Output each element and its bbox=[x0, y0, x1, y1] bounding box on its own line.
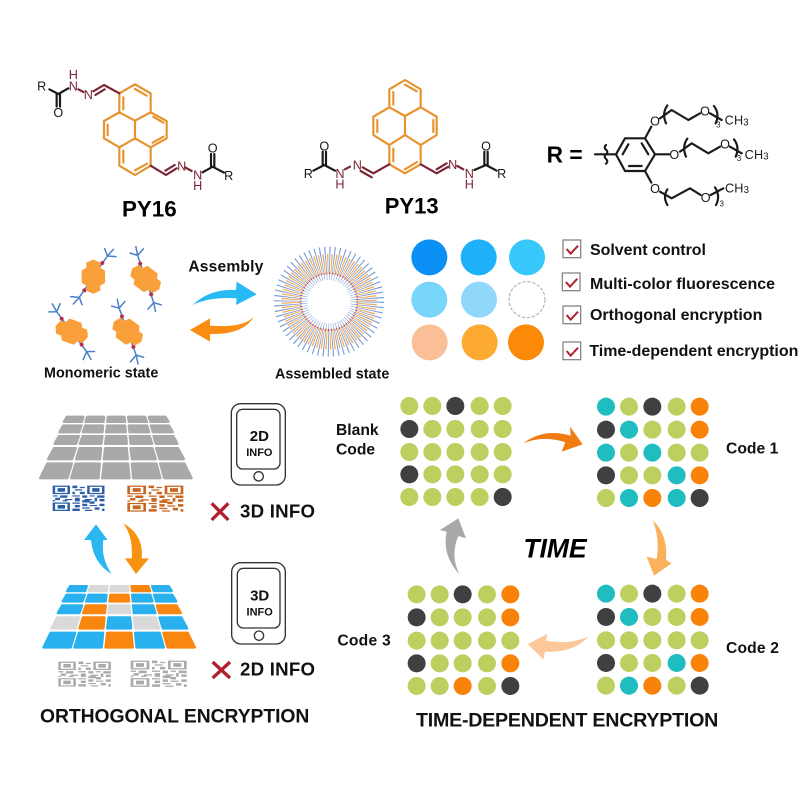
atom labels PY16 bbox=[37, 68, 233, 193]
label code 1: Code 1 bbox=[726, 441, 779, 458]
phone: 3D info bbox=[232, 563, 285, 644]
dot grid: blank code bbox=[400, 397, 512, 506]
chain atoms: O bbox=[720, 138, 730, 152]
checklist item: time-dependent encryption: Time-dependent encryption bbox=[589, 343, 798, 360]
atom labels PY16: N bbox=[177, 160, 186, 174]
phone: 3D info: 3D bbox=[250, 587, 269, 604]
heading: time-dependent encryption: TIME-DEPENDENT ENCRYPTION bbox=[416, 710, 718, 732]
panel: assembly process bbox=[38, 244, 389, 383]
chain atoms: 3 bbox=[744, 185, 749, 196]
chain atoms: O bbox=[701, 191, 711, 205]
atom labels PY13: O bbox=[481, 139, 491, 153]
atom labels PY16: O bbox=[53, 106, 63, 120]
chain atoms: CH bbox=[725, 181, 743, 195]
label TIME: TIME bbox=[523, 534, 588, 564]
gray QR code left bbox=[58, 662, 111, 687]
molecule: PY13 bbox=[304, 80, 506, 218]
atom labels PY16: N bbox=[69, 79, 78, 93]
carbonyl bonds PY13 bbox=[313, 152, 497, 171]
phone: 3D info: INFO bbox=[247, 606, 273, 618]
atom labels PY13 bbox=[304, 139, 506, 192]
blue QR code bbox=[53, 486, 104, 511]
swatch row 3 bbox=[412, 324, 544, 360]
gray perspective grid bbox=[40, 417, 191, 478]
checklist item: multi-color fluorescence: Multi-color fluorescence bbox=[590, 276, 775, 293]
atom labels PY16: O bbox=[208, 142, 218, 156]
heading: orthogonal encryption: ORTHOGONAL ENCRYPTION bbox=[40, 706, 309, 727]
arrow: blank to code 1 bbox=[523, 427, 583, 452]
panel: time-dependent encryption bbox=[336, 397, 779, 732]
chain atoms: 3 bbox=[763, 152, 769, 163]
chain atoms: O bbox=[650, 182, 660, 196]
monomer 4 bbox=[92, 297, 164, 366]
atom labels PY13: O bbox=[319, 139, 329, 153]
panel: 3D state QR, phone and label bbox=[40, 563, 315, 727]
swatch row 2 bbox=[411, 282, 545, 318]
atom labels PY13: N bbox=[335, 167, 345, 181]
carbonyl bonds PY16 bbox=[49, 88, 224, 173]
atom labels PY13: N bbox=[353, 158, 362, 172]
atom labels PY16: H bbox=[69, 68, 78, 82]
chain atoms: O bbox=[700, 104, 710, 118]
chain atoms: CH bbox=[745, 148, 763, 162]
checklist item: solvent control: Solvent control bbox=[590, 242, 706, 259]
atom labels PY13: R bbox=[304, 167, 313, 181]
label assembly: Assembly bbox=[188, 259, 264, 276]
atom labels PY16: H bbox=[193, 179, 202, 193]
chain atoms: 3 bbox=[737, 154, 742, 163]
label R equals: R = bbox=[547, 142, 583, 168]
assembled micelle bbox=[291, 263, 367, 340]
label code 3: Code 3 bbox=[337, 633, 391, 650]
chain atoms: O bbox=[669, 148, 679, 162]
panel: orthogonal encryption, 2D state bbox=[40, 404, 315, 521]
label PY16: PY16 bbox=[122, 197, 177, 222]
phone: 2D info: INFO bbox=[246, 447, 273, 459]
monomer 1 bbox=[71, 249, 116, 305]
chain atoms: 3 bbox=[743, 117, 749, 128]
molecule: R group bbox=[547, 104, 769, 209]
label code 2: Code 2 bbox=[726, 640, 779, 657]
label 2D INFO: 2D INFO bbox=[240, 659, 315, 680]
atom labels PY16: R bbox=[37, 79, 46, 93]
atom labels PY13: N bbox=[448, 158, 457, 172]
dot grid: code 2 bbox=[597, 585, 709, 695]
icon: red cross bbox=[213, 662, 230, 678]
atom labels PY16: N bbox=[193, 168, 202, 182]
aromatic ring with substituents bbox=[595, 127, 669, 183]
chain atoms: O bbox=[650, 114, 660, 128]
phone: 2D info bbox=[231, 404, 285, 485]
swatch row 1 bbox=[411, 239, 545, 275]
monomer 3 bbox=[38, 301, 106, 362]
orange QR code bbox=[127, 486, 183, 512]
phone: 2D info: 2D bbox=[250, 428, 269, 445]
monomer 2 bbox=[110, 244, 182, 314]
label monomeric state: Monomeric state bbox=[44, 365, 158, 381]
chain atoms: CH bbox=[725, 114, 743, 128]
atom labels PY13: H bbox=[465, 178, 474, 192]
label PY13: PY13 bbox=[385, 193, 439, 218]
atom labels PY13: H bbox=[335, 178, 345, 192]
arrow: code 3 to blank bbox=[440, 518, 466, 574]
atom labels PY13: R bbox=[497, 167, 506, 181]
checklist item: orthogonal encryption: Orthogonal encryption bbox=[590, 307, 762, 324]
coloured perspective grid bbox=[44, 586, 195, 647]
atom labels PY16: N bbox=[84, 88, 93, 102]
arrow: code 1 to code 2 bbox=[647, 520, 672, 576]
label blank code: Blank bbox=[336, 422, 379, 439]
ether chains bbox=[660, 105, 742, 205]
pyrene core PY13 bbox=[373, 80, 437, 173]
dot grid: code 1 bbox=[597, 398, 709, 507]
hydrazone chains PY13 bbox=[345, 163, 463, 177]
chain atoms: 3 bbox=[719, 200, 724, 209]
hydrazone chains PY16 bbox=[78, 85, 192, 175]
atom labels PY16: R bbox=[224, 169, 233, 183]
dot grid: code 3 bbox=[408, 585, 519, 695]
arrow: blue up bbox=[84, 524, 112, 574]
arrow: orange back bbox=[190, 317, 254, 342]
panel: orthogonal encryption, 3D state bbox=[44, 586, 195, 647]
label assembled state: Assembled state bbox=[275, 367, 389, 383]
atom labels PY13: N bbox=[465, 167, 474, 181]
pyrene core PY16 bbox=[104, 84, 167, 175]
gray QR code right bbox=[131, 661, 187, 687]
molecule: PY16 bbox=[37, 68, 233, 222]
chain atoms: 3 bbox=[716, 121, 721, 130]
icon: red cross bbox=[212, 503, 228, 520]
label blank code: Code bbox=[336, 441, 375, 458]
chain atoms bbox=[650, 104, 769, 209]
arrow: blue forward bbox=[193, 282, 257, 305]
arrow: orange down bbox=[123, 523, 149, 574]
arrow: code 2 to code 3 bbox=[528, 634, 588, 659]
panel: colour swatches bbox=[411, 239, 798, 360]
label 3D INFO: 3D INFO bbox=[240, 500, 315, 521]
